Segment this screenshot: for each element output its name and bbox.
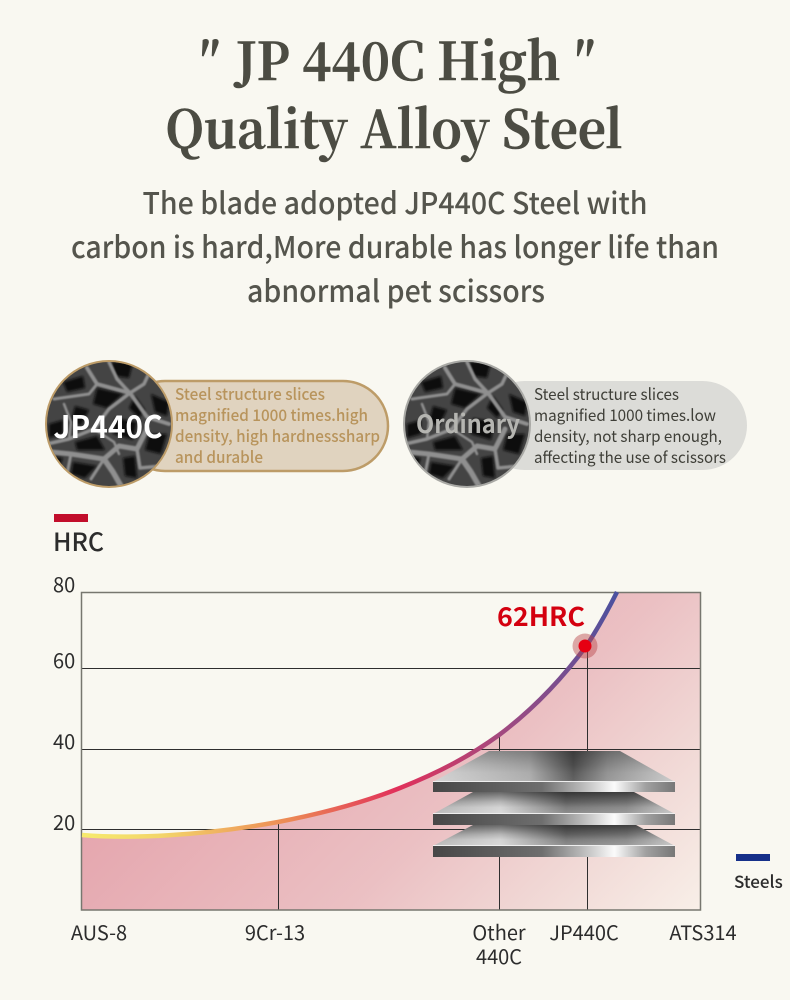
y axis labels: 80: [53, 569, 75, 598]
62HRC callout: 62HRC: [497, 597, 585, 634]
title: JP 440C High: [233, 20, 560, 95]
Ordinary description pill: [480, 381, 747, 470]
y axis labels: [53, 569, 75, 836]
Ordinary description pill: affecting the use of scissors: [534, 444, 726, 468]
JP440C description pill: [120, 381, 388, 471]
Ordinary description pill: density, not sharp enough,: [534, 423, 722, 447]
data point marker: [572, 634, 598, 658]
x axis labels: 9Cr-13: [245, 917, 305, 946]
legend: Steels: Steels: [734, 868, 783, 893]
Ordinary micrograph circle: [403, 360, 531, 488]
subtitle text block: The blade adopted JP440C Steel with: [142, 179, 648, 223]
legend: HRC: HRC: [53, 523, 104, 559]
icon: stacked steel plates: [433, 751, 675, 857]
JP440C description pill: magnified 1000 times.high: [175, 402, 368, 426]
JP440C description pill: and durable: [175, 444, 263, 468]
line chart: [53, 569, 737, 970]
hardness curve: [82, 592, 617, 837]
JP440C description pill: density, high hardnesssharp: [175, 423, 380, 447]
subtitle text block: [71, 179, 719, 311]
Ordinary micrograph circle: Ordinary: [416, 405, 521, 441]
grid lines: [82, 645, 701, 910]
JP440C description pill: Steel structure slices: [175, 381, 325, 405]
title: ″: [199, 25, 222, 91]
y axis labels: 60: [53, 645, 75, 674]
x axis labels: AUS-8: [71, 917, 127, 946]
y axis labels: 40: [53, 726, 75, 755]
x axis labels: JP440C: [549, 917, 619, 946]
title: [166, 20, 622, 163]
x axis labels: [71, 917, 737, 970]
x axis labels: 440C: [476, 941, 522, 970]
legend: Steels: [734, 854, 783, 893]
x axis labels: ATS314: [669, 917, 737, 946]
y axis labels: 20: [53, 807, 75, 836]
JP440C micrograph circle: [45, 360, 173, 488]
subtitle text block: carbon is hard,More durable has longer life than: [71, 223, 719, 267]
title: ″: [574, 25, 597, 91]
JP440C micrograph circle: JP440C: [54, 402, 162, 447]
Ordinary description pill: Steel structure slices: [534, 381, 679, 405]
panel: JP440C steel: [39, 354, 388, 494]
x axis labels: Other: [472, 917, 526, 946]
Ordinary description pill: magnified 1000 times.low: [534, 402, 716, 426]
panel: Ordinary steel: [403, 360, 747, 488]
title: Quality Alloy Steel: [166, 88, 622, 163]
chart area fill: [82, 592, 701, 910]
chart frame: [82, 592, 700, 910]
subtitle text block: abnormal pet scissors: [247, 267, 545, 311]
